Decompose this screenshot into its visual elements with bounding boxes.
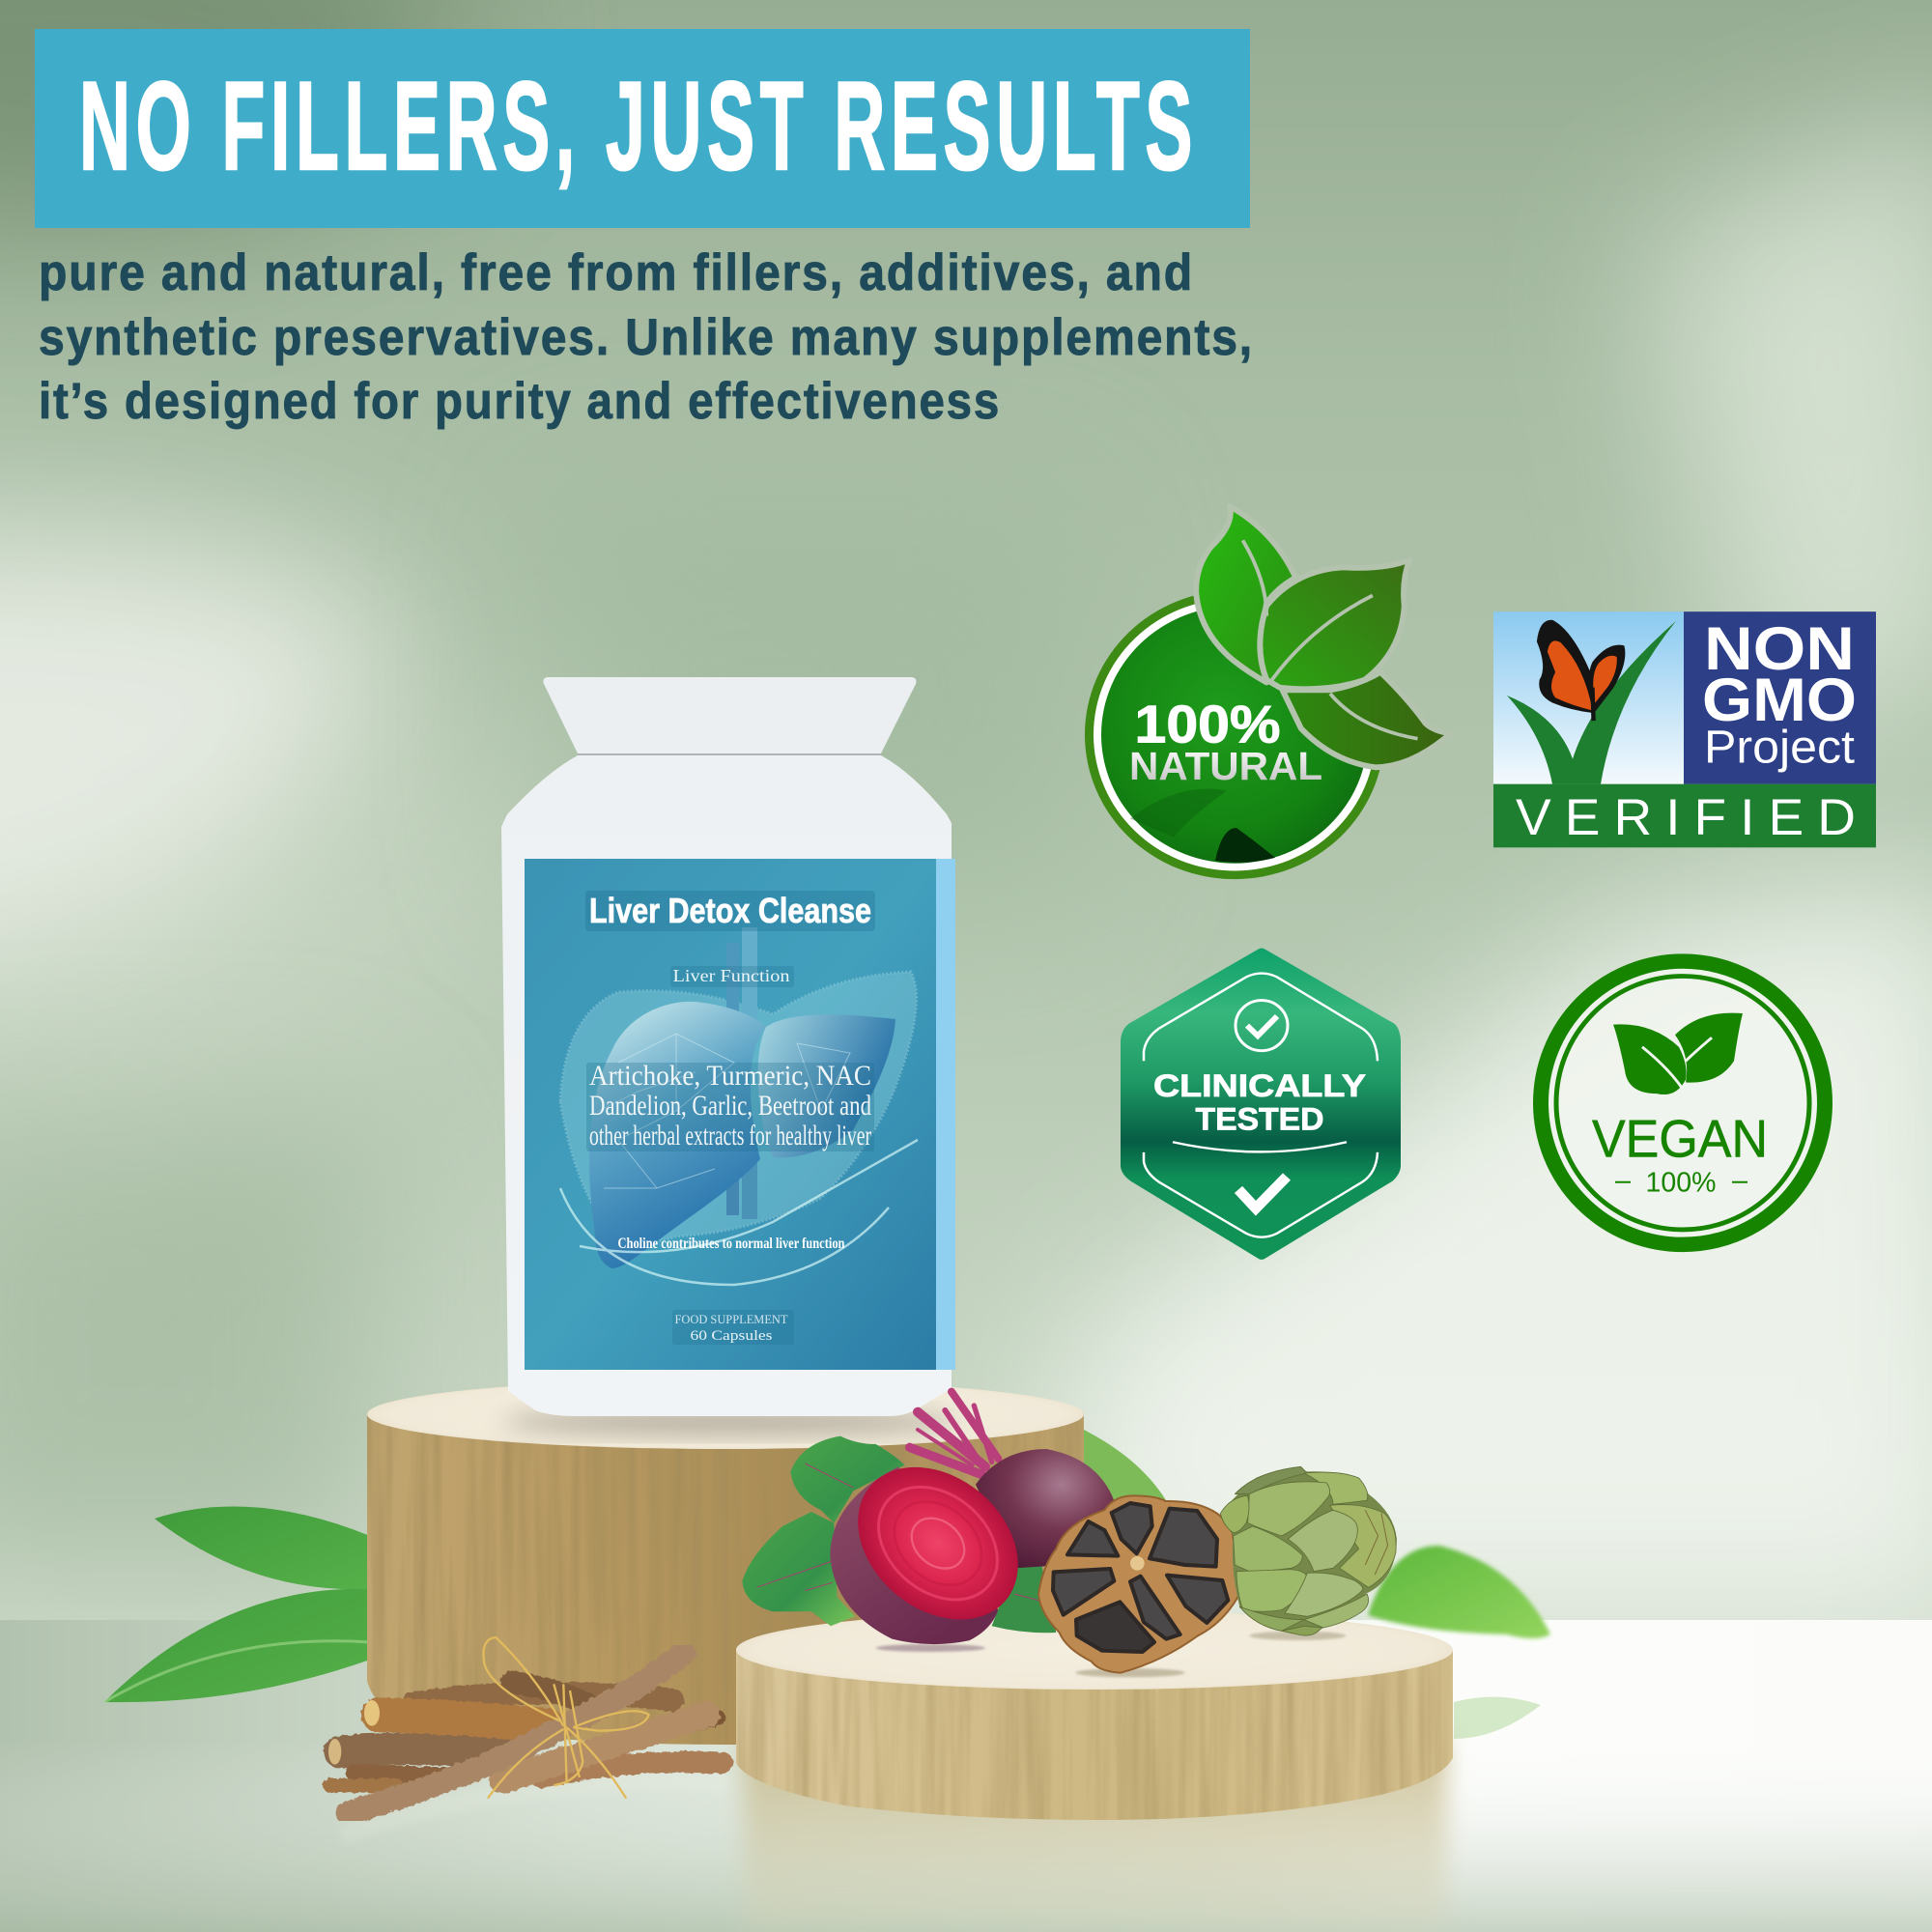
label text: Artichoke, Turmeric, NAC [589, 1060, 871, 1092]
description text: synthetic preservatives. Unlike many supplements, [39, 309, 1254, 366]
bottle body [501, 755, 952, 1416]
title banner [35, 29, 1250, 228]
badge: non GMO project verified [1493, 611, 1876, 847]
butterfly [1537, 620, 1625, 721]
back leaves [104, 1430, 1550, 1739]
product label [525, 859, 955, 1370]
label text: Choline contributes to normal liver function [618, 1236, 845, 1252]
supplement bottle [501, 677, 955, 1416]
label text: other herbal extracts for healthy liver [589, 1120, 871, 1151]
badge: non GMO project verified: VERIFIED [1516, 789, 1856, 846]
leaves [1196, 506, 1451, 767]
badge: clinically tested: CLINICALLY [1153, 1068, 1366, 1104]
label text: Dandelion, Garlic, Beetroot and [589, 1090, 871, 1122]
badge: clinically tested [1126, 953, 1395, 1254]
halved beet [828, 1435, 1048, 1652]
pedestal reflection [744, 1739, 1447, 1932]
label text: 60 Capsules [690, 1328, 773, 1344]
beet stems [910, 1392, 998, 1475]
label text [585, 891, 875, 1345]
badge: non GMO project verified: GMO [1702, 666, 1857, 734]
front wooden pedestal [736, 1610, 1455, 1826]
licorice root bundle [328, 1637, 727, 1835]
badge: non GMO project verified: NON [1704, 614, 1855, 683]
black garlic [1038, 1495, 1240, 1677]
badge: vegan 100%: 100% [1646, 1167, 1717, 1198]
beet leaves [742, 1436, 1056, 1633]
floor [0, 1620, 1932, 1932]
badge: vegan 100% [1541, 961, 1825, 1244]
beetroot group [742, 1392, 1114, 1652]
back wooden pedestal [367, 1379, 1086, 1748]
label text: FOOD SUPPLEMENT [674, 1312, 788, 1326]
badge text: 100% [1134, 694, 1280, 753]
description text: pure and natural, free from fillers, additives, and [39, 244, 1194, 301]
badge: 100% natural: NATURAL [1129, 745, 1322, 788]
description text: it’s designed for purity and effectiveness [39, 373, 1001, 430]
badge: 100% natural [1085, 506, 1451, 879]
badge: vegan 100%: VEGAN [1592, 1109, 1768, 1168]
label text: Liver Detox Cleanse [589, 891, 871, 930]
bottle cap [543, 677, 916, 753]
liver illustration [560, 927, 918, 1285]
artichoke [1220, 1466, 1397, 1640]
description text [39, 244, 1254, 430]
whole beet [976, 1449, 1114, 1568]
badge: non GMO project verified: Project [1704, 722, 1855, 773]
label text: Liver Function [672, 966, 790, 985]
badge: clinically tested: TESTED [1196, 1102, 1323, 1138]
